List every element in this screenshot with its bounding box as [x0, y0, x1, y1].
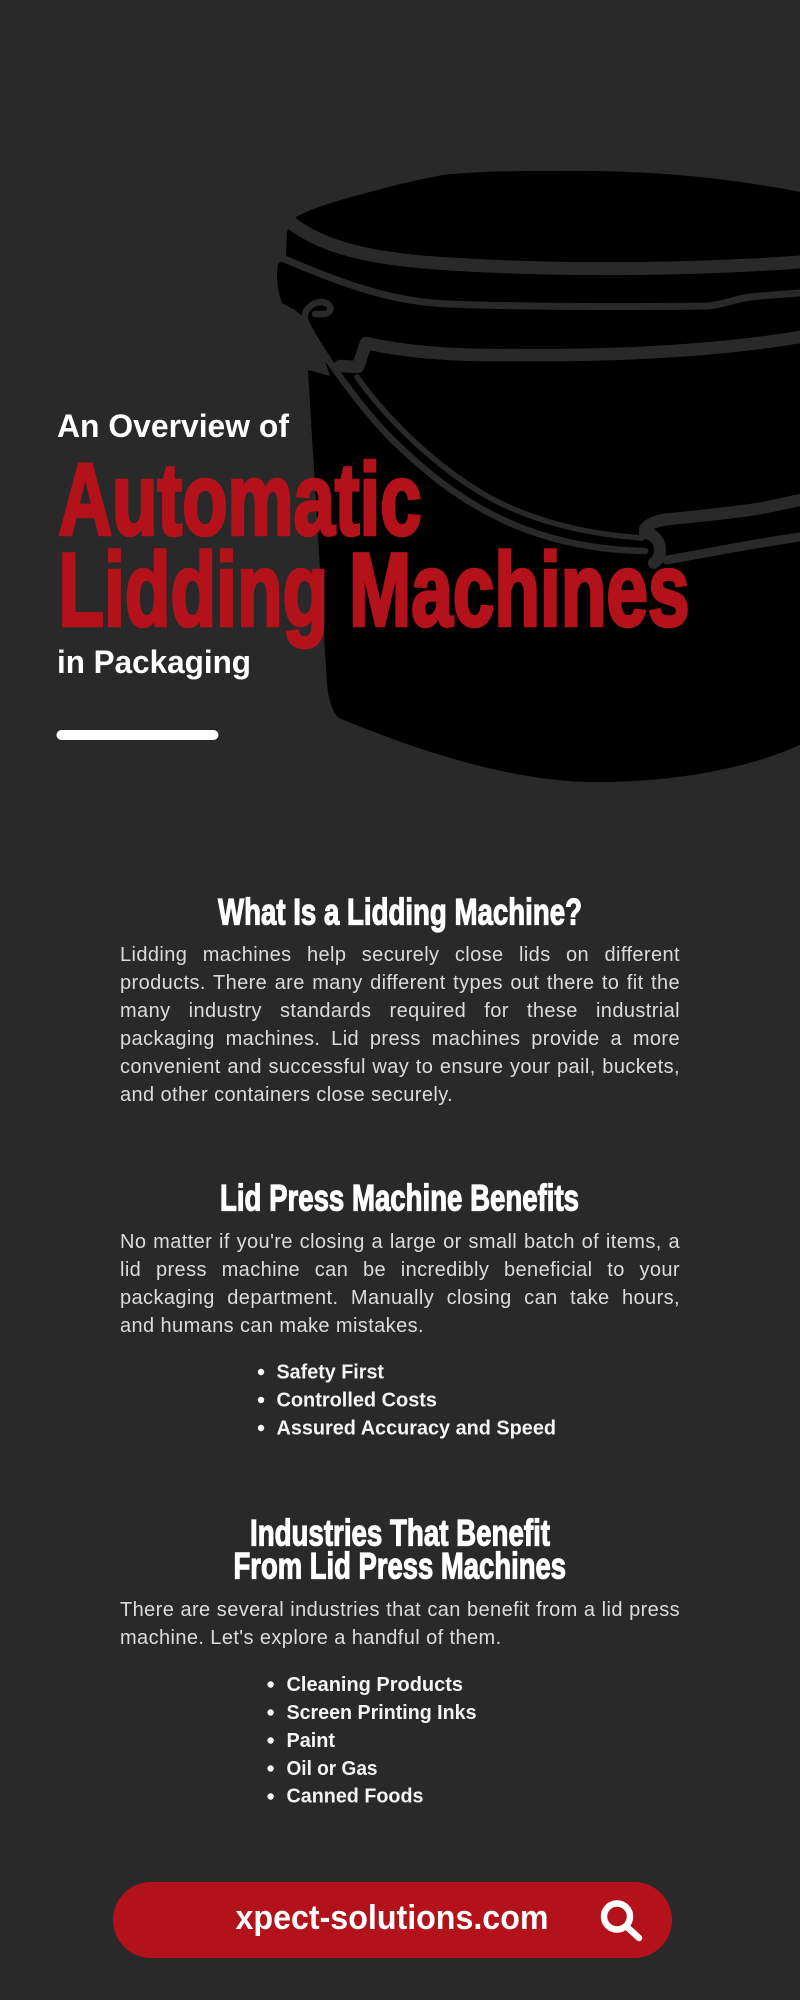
text block: industries description — [120, 1599, 680, 1649]
text block: lid press benefits description — [120, 1230, 680, 1336]
list: industries: Paint — [286, 1730, 335, 1752]
footer pill with website — [113, 1882, 672, 1958]
list: industries: Cleaning Products — [286, 1674, 463, 1696]
text block: lidding machine description: convenient and successful way to ensure your pail, buckets, — [120, 1056, 680, 1078]
heading: Industries That Benefit From Lid Press Machines — [234, 1512, 566, 1586]
heading: What Is a Lidding Machine?: What Is a Lidding Machine? — [218, 892, 582, 932]
list: industries: Oil or Gas — [286, 1758, 378, 1780]
text block: lidding machine description: products. There are many different types out there to fit the — [120, 972, 680, 994]
list: industries — [267, 1674, 476, 1808]
text block: lidding machine description — [120, 944, 680, 1106]
list: industries: Canned Foods — [286, 1786, 424, 1808]
text block: lidding machine description: and other containers close securely. — [120, 1084, 453, 1106]
list: benefits: Controlled Costs — [276, 1390, 437, 1412]
list: industries: Screen Printing Inks — [286, 1702, 476, 1724]
title: Automatic: Automatic — [58, 442, 422, 556]
list: benefits — [258, 1362, 556, 1440]
footer: website url: xpect-solutions.com — [236, 1899, 548, 1937]
text block: industries description: machine. Let's explore a handful of them. — [120, 1627, 502, 1649]
list: benefits: Safety First — [276, 1362, 384, 1384]
heading: Industries That Benefit From Lid Press Machines: Industries That Benefit — [250, 1512, 550, 1554]
icon: magnifying glass — [604, 1904, 639, 1938]
text block: lid press benefits description: and humans can make mistakes. — [120, 1314, 424, 1336]
text block: lidding machine description: packaging machines. Lid press machines provide a more — [120, 1028, 680, 1050]
text block: lid press benefits description: lid press machine can be incredibly beneficial to your — [120, 1258, 680, 1280]
text block: industries description: There are several industries that can benefit from a lid press — [120, 1599, 680, 1621]
heading: Lid Press Machine Benefits: Lid Press Machine Benefits — [220, 1178, 579, 1218]
list: benefits: Assured Accuracy and Speed — [276, 1418, 556, 1440]
text block: lid press benefits description: packaging department. Manually closing can take hours, — [120, 1286, 680, 1308]
white accent bar — [56, 730, 218, 740]
text block: lidding machine description: many industry standards required for these industrial — [120, 1000, 680, 1022]
icon: black bucket silhouette — [277, 171, 800, 782]
title: An Overview of: An Overview of — [57, 408, 289, 444]
title: in Packaging: in Packaging — [57, 644, 251, 680]
heading: Industries That Benefit From Lid Press Machines: From Lid Press Machines — [234, 1546, 566, 1586]
text block: lid press benefits description: No matter if you're closing a large or small batch of items, a — [120, 1230, 680, 1252]
text block: lidding machine description: Lidding machines help securely close lids on different — [120, 944, 680, 966]
